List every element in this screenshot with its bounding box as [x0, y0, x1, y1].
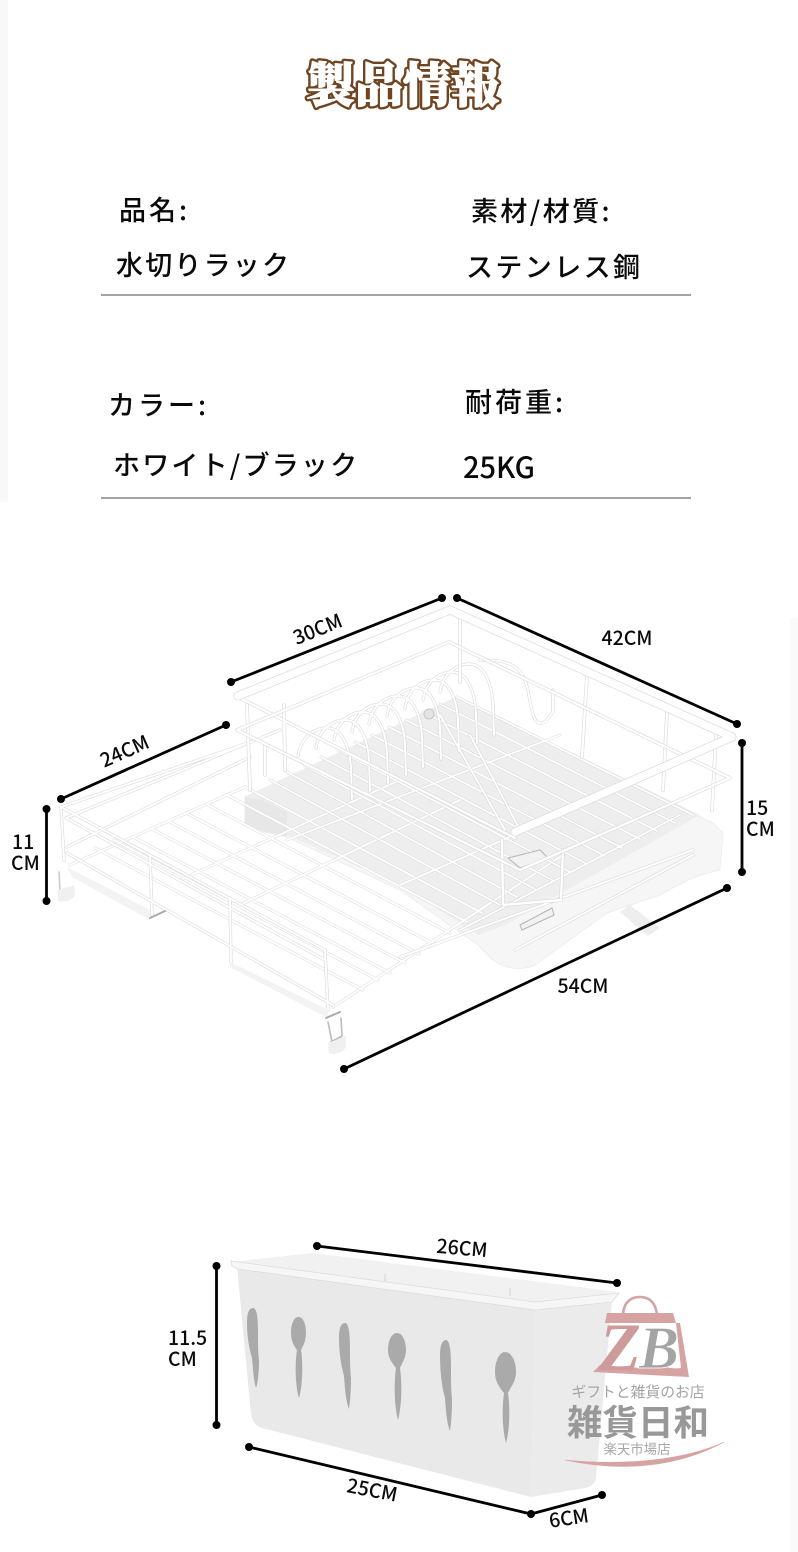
drain spout [424, 709, 554, 930]
slot: knife 3 [440, 1340, 452, 1431]
title: 製品情報 [307, 47, 499, 116]
dimension: 11CM: CM [11, 847, 40, 876]
dimension: 6CM: 6CM [547, 1499, 590, 1534]
dimension: 30CM: 30CM [288, 605, 346, 651]
slot: spoon 1 [291, 1317, 306, 1398]
holder inner back wall [231, 1253, 619, 1304]
dimension: 11.5CM [168, 1262, 220, 1429]
logo: B monogram: B [638, 1315, 679, 1381]
watermark logo [565, 1297, 724, 1466]
upper rack frame [237, 610, 732, 905]
divider row 2 [101, 497, 691, 499]
dimension: 15CM [738, 739, 775, 876]
dimension: 11CM: 11 [12, 826, 34, 855]
slot: knife 1 [247, 1308, 259, 1388]
dimension: 42CM: 42CM [601, 622, 653, 651]
holder rim [231, 1261, 619, 1310]
spec value: load capacity: 25KG [463, 445, 535, 487]
holder front face [237, 1266, 535, 1497]
lower rack wires [61, 730, 693, 1010]
dimension: 6CM [531, 1491, 606, 1534]
spec label: material: 素材/材質: [471, 190, 612, 229]
dimension: 54CM [340, 884, 731, 1073]
dimension: 25CM [245, 1443, 535, 1518]
dimension: 54CM: 54CM [557, 970, 609, 999]
divider row 1 [101, 294, 691, 296]
rack feet [58, 872, 346, 1054]
dimension: 11CM [11, 805, 50, 905]
rack foot plates [67, 867, 340, 1018]
dimension: 25CM: 25CM [345, 1469, 400, 1508]
dimension: 42CM [453, 594, 741, 728]
spec panel [101, 189, 691, 499]
slot: spoon 3 [495, 1352, 516, 1443]
spec value: material: ステンレス鋼 [466, 246, 642, 285]
dimension: 11.5CM: CM [168, 1343, 197, 1372]
dimension: 15CM: 15 [746, 792, 768, 821]
spec value: product name: 水切りラック [116, 244, 291, 283]
dimension: 11.5CM: 11.5 [168, 1322, 207, 1351]
spec label: color: カラー: [108, 384, 209, 423]
slot: knife 2 [339, 1323, 351, 1409]
logo: tagline: ギフトと雑貨のお店 [571, 1381, 705, 1402]
logo: Z monogram: Z [598, 1309, 641, 1385]
holder right face [531, 1301, 612, 1497]
logo: shop name: 雑貨日和 [567, 1395, 709, 1446]
dimension: 24CM: 24CM [95, 726, 153, 773]
background strip: right edge [790, 618, 798, 1552]
illustration: cutlery holder [231, 1253, 619, 1497]
logo: shopping bag [593, 1313, 689, 1377]
illustration: dish rack [58, 610, 732, 1054]
background strip: left edge [0, 0, 8, 502]
spec label: product name: 品名: [119, 189, 190, 228]
spec value: color: ホワイト/ブラック [113, 444, 359, 483]
dimension: 26CM [313, 1230, 621, 1287]
logo: bag handle [623, 1297, 657, 1314]
dimension: 24CM [57, 721, 230, 803]
logo: swoosh [565, 1442, 724, 1466]
dimension: 15CM: CM [746, 813, 775, 842]
dimension: 26CM: 26CM [436, 1230, 489, 1263]
spec label: load capacity: 耐荷重: [465, 381, 566, 420]
drip tray [245, 697, 723, 969]
plate rack arches [298, 660, 553, 830]
logo: sub name: 楽天市場店 [604, 1438, 670, 1458]
title: 製品情報 [307, 47, 499, 116]
tray wires [270, 697, 693, 930]
holder inner dividers [385, 1274, 510, 1296]
slot: spoon 2 [388, 1333, 406, 1420]
dimension: 30CM [227, 594, 446, 686]
